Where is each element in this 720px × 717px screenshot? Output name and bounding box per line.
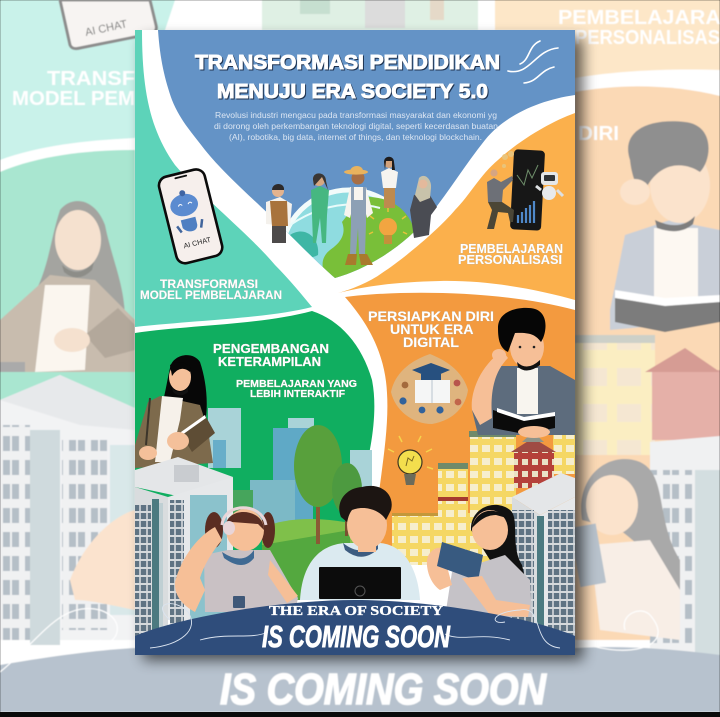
background figure: woman with tablet [570,459,680,640]
figure: farmer [344,166,373,265]
figure: businesswoman in hijab [410,176,437,238]
icon: light bulb [388,436,433,485]
poster [135,30,575,655]
panel: blue header [158,30,575,278]
panel: teal [135,30,312,327]
intro paragraph: (AI), robotika, big data, internet of things, dan teknologi blockchain. [229,132,482,142]
yellow buildings [392,431,575,565]
poster shadow [143,38,583,660]
label: persiapkan diri untuk era digital: DIGITAL [403,334,459,350]
figure: student [266,184,292,243]
label: persiapkan diri untuk era digital: PERSIAPKAN DIRI [368,308,494,324]
background text: pembelajaran personalisasi: PEMBELAJARA [558,7,720,29]
background phone [60,0,156,49]
intro paragraph: di dorong oleh perkembangan teknologi digital, seperti kecerdasan buatan [214,121,498,131]
figure: boy reading book [472,308,575,438]
figure: businessman with phone and robot [487,149,563,231]
label: pengembangan keterampilan: PENGEMBANGAN [213,341,329,356]
banner slogan: IS COMING SOON [262,619,450,654]
banner heading: THE ERA OF SOCIETY [269,604,443,619]
icon: ai chat phone [157,168,224,265]
background text: transformasi model pembelajaran: MODEL PEM [12,87,135,110]
panel: dark orange [345,293,575,560]
background figure: boy with book [610,121,720,332]
figure: girl with tablet [427,505,532,617]
decorative swirl lines [508,41,558,83]
businessman [487,169,514,229]
panel: green [135,311,374,550]
banner swirls [150,604,560,648]
banner: navy arc [135,600,575,655]
small robot [536,172,563,200]
globe [286,188,414,278]
label: transformasi model pembelajaran: TRANSFORMASI [160,277,258,291]
label: persiapkan diri untuk era digital: UNTUK ERA [390,321,473,337]
grey tower right [512,473,575,640]
background buildings right [575,335,720,660]
background panel: pale peach [495,0,720,640]
infographic: graduation book cluster [391,354,468,424]
label: transformasi model pembelajaran: MODEL PEMBELAJARAN [140,288,282,302]
background text: is coming soon: IS COMING SOON [220,665,547,714]
background panel: pale teal [0,0,175,640]
background ground ellipse [0,608,720,712]
label: pembelajaran personalisasi: PEMBELAJARAN [460,241,563,256]
figure: boy with laptop [300,486,420,600]
icon: fist light bulb [369,208,407,244]
background phone: AI CHAT [84,18,129,39]
label: pengembangan keterampilan: KETERAMPILAN [218,354,321,369]
tree [294,425,362,544]
label: ai chat: AI CHAT [183,235,212,250]
figure: girl with headphones [175,508,298,612]
background building left [0,375,135,645]
background text: diri: DIRI [578,123,619,145]
label: pembelajaran yang lebih interaktif: PEMBELAJARAN YANG [236,378,357,390]
background top centre scene [262,0,478,30]
figure: doctor [381,157,398,208]
coins [502,151,514,168]
title: TRANSFORMASI PENDIDIKAN [195,52,500,74]
label: pembelajaran yang lebih interaktif: LEBIH INTERAKTIF [250,388,346,400]
panel: light orange [338,113,575,300]
figure: woman holding book [135,355,215,468]
figure: medic in green [311,173,329,243]
background figure: woman with book [0,201,135,372]
city skyline in green panel [208,408,372,600]
label: pembelajaran personalisasi: PERSONALISASI [458,252,562,267]
grey tower left [135,457,233,640]
dashboard phone [510,149,545,231]
background text: transformasi model pembelajaran: TRANSF [47,67,135,90]
title: MENUJU ERA SOCIETY 5.0 [217,81,488,103]
red building [511,432,556,488]
robot mascot [170,190,204,234]
intro paragraph: Revolusi industri mengacu pada transformasi masyarakat dan ekonomi yg [215,110,497,120]
bottom black strip [0,712,720,717]
